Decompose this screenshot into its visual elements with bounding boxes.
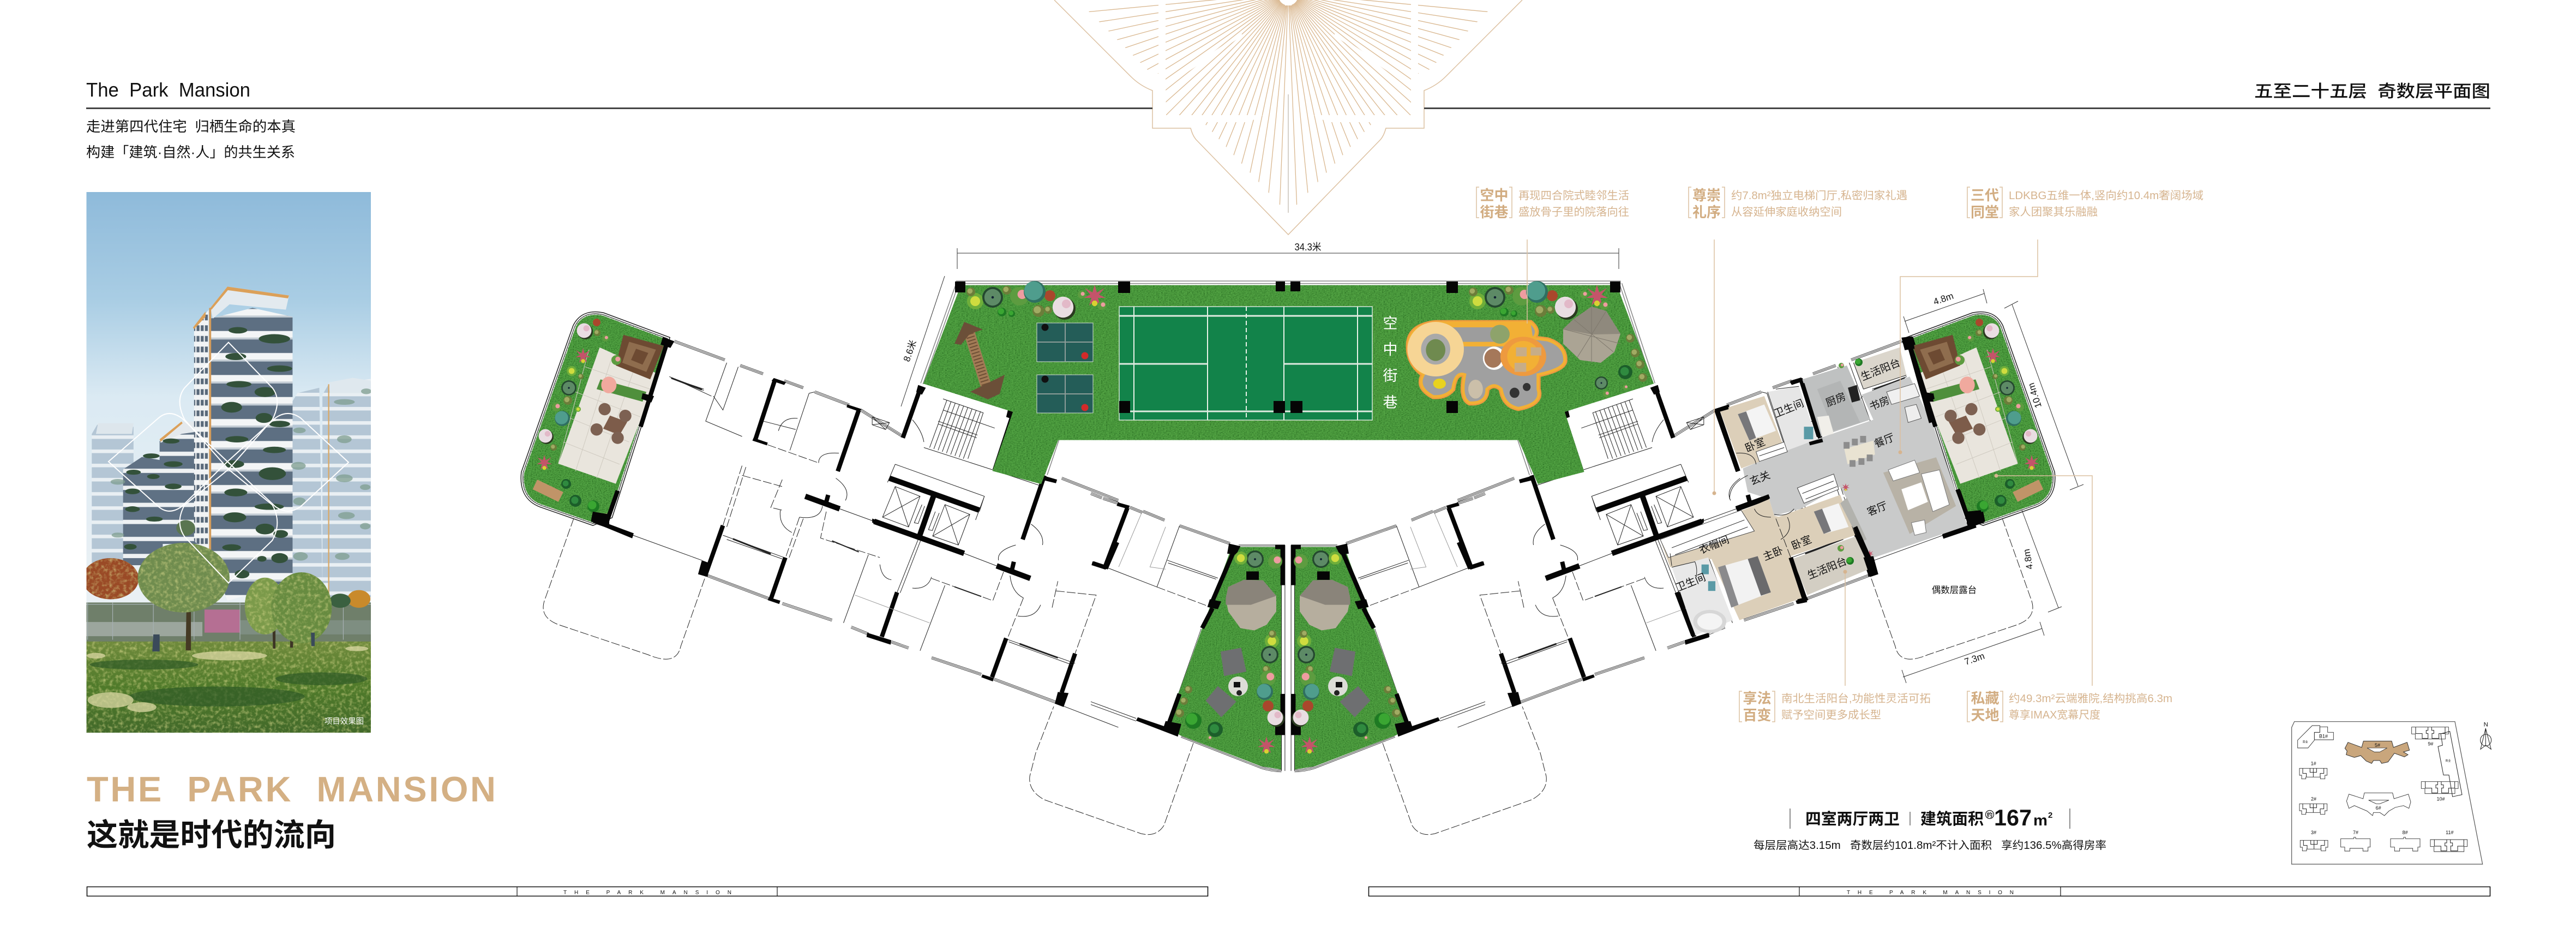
photo caption: 项目效果图: [325, 717, 364, 726]
label: sky street: [1383, 315, 1397, 411]
dimension: 8.6m: [901, 276, 945, 406]
label: sky street: 巷: [1383, 394, 1397, 411]
playground: [1407, 322, 1565, 408]
dimension: 4.8m top: 4.8m: [1932, 291, 1955, 307]
callout: private garden: [1967, 690, 2172, 723]
building B1: B1#: [2319, 734, 2328, 739]
callout: lobby: 约7.8m²独立电梯门厅,私密归家礼遇: [1731, 189, 1907, 202]
panel: sky street court: [922, 281, 1654, 484]
text block: floor notes: 每层层高达3.15m 奇数层约101.8m²不计入面积 享约136.5%高得房率: [1754, 839, 2106, 852]
commercial block east: [2438, 732, 2462, 797]
room labels: 卧室: [1743, 436, 1767, 454]
building 2: [2299, 796, 2327, 815]
callout: sky street: 空中: [1480, 187, 1509, 203]
callout: lobby: 礼序: [1692, 204, 1721, 220]
label: sky street: 空: [1383, 315, 1397, 332]
building 3: 3#: [2311, 830, 2316, 835]
dimension: 7.3m: 7.3m: [1963, 651, 1986, 667]
building 3: [2300, 830, 2328, 851]
area summary: 约: [1987, 811, 1992, 818]
callout: lobby: 从容延伸家庭收纳空间: [1731, 206, 1842, 218]
title: The Park Mansion: The Park Mansion: [86, 79, 250, 101]
building 1: 1#: [2311, 761, 2316, 766]
room labels: 生活阳台: [1806, 555, 1848, 582]
building 11: 11#: [2446, 830, 2453, 835]
callout: three generations: LDKBG五维一体,竖向约10.4m奢阔场域: [2009, 189, 2203, 202]
room labels: 卫生间: [1674, 571, 1708, 594]
dimension: 10.4m: [2004, 301, 2083, 490]
building 6: 6#: [2376, 805, 2381, 811]
even floor terrace outline: [543, 518, 1193, 835]
room labels: 玄关: [1748, 469, 1772, 488]
building 10: 10#: [2436, 796, 2445, 801]
table tennis tables: [1037, 323, 1093, 413]
leader lines: [1527, 240, 2092, 686]
icon: north arrow: [2481, 721, 2491, 749]
building 2: 2#: [2311, 796, 2316, 801]
label: sky street: 街: [1383, 368, 1397, 384]
building 9: 9#: [2428, 741, 2433, 746]
room labels: [1674, 357, 1902, 594]
room labels: 书房: [1868, 394, 1892, 413]
dimension: 34.3m width: 34.3米: [1295, 242, 1321, 253]
callout: sky street: [1476, 187, 1629, 220]
callout: private garden: 天地: [1971, 707, 1999, 723]
header rule left: [86, 107, 1152, 109]
building 6: [2346, 793, 2411, 816]
centre garden plants: [1175, 550, 1284, 753]
callout: private garden: 私藏: [1971, 690, 1999, 707]
floor plan: left half: [524, 314, 1288, 835]
area summary: 2: [2048, 811, 2052, 820]
callout: private garden: 尊享IMAX宽幕尺度: [2009, 709, 2100, 721]
wing walls and room lines: [591, 337, 1118, 727]
badminton court: [1119, 307, 1372, 420]
callout: lobby: [1689, 187, 1907, 220]
callout: balconies: 百变: [1743, 707, 1772, 723]
text block: slogan: [86, 118, 296, 160]
room labels: 餐厅: [1872, 432, 1896, 450]
footer band left: THE PARK MANSION: [563, 890, 731, 896]
room labels: 衣帽间: [1697, 534, 1731, 556]
callout: balconies: [1739, 690, 1931, 723]
dimension: 34.3m width: [957, 242, 1619, 269]
room labels: 卫生间: [1772, 397, 1806, 420]
callout: three generations: [1967, 187, 2203, 220]
building B1: 商业: [2303, 740, 2308, 744]
heading: slogan: 这就是时代的流向: [87, 818, 336, 853]
wooden bench: [954, 322, 1005, 399]
heading: floor plan title: 五至二十五层 奇数层平面图: [2254, 82, 2490, 101]
building 5 highlighted: [2345, 741, 2410, 763]
site boundary: [2292, 722, 2483, 864]
callout: sky street: 再现四合院式睦邻生活: [1518, 189, 1629, 202]
icon: north arrow: N: [2484, 721, 2488, 728]
site key map: [2292, 721, 2491, 864]
room floors: [1660, 348, 1967, 636]
plant cluster right: [1469, 281, 1608, 320]
footer band right: [1369, 887, 2490, 896]
room labels: 生活阳台: [1859, 357, 1902, 383]
sunburst decoration: [1054, 0, 1523, 235]
callout: lobby: 尊崇: [1692, 187, 1721, 203]
callout: sky street: 盛放骨子里的院落向往: [1518, 206, 1629, 218]
end terrace garden: [524, 314, 666, 523]
east side plants: [1595, 334, 1647, 397]
callout: balconies: 南北生活阳台,功能性灵活可拓: [1781, 692, 1931, 705]
dimension: 4.8m lower: 4.8m: [2021, 548, 2035, 570]
plant cluster: [966, 281, 1106, 320]
callout: balconies: 享法: [1743, 690, 1772, 707]
building 5 highlighted: 5#: [2375, 743, 2380, 748]
balcony plants: [1838, 358, 1874, 565]
room labels: 卧室: [1790, 534, 1814, 552]
footer band left: [87, 887, 1208, 896]
parasol: [1563, 307, 1620, 363]
building 10: [2421, 782, 2458, 801]
court lawn: [922, 282, 1654, 484]
label: even floor terrace: 偶数层露台: [1932, 585, 1977, 595]
text block: slogan: 走进第四代住宅 归栖生命的本真: [86, 118, 296, 135]
panel: building rendering photo: [82, 191, 371, 734]
building 1: [2299, 761, 2327, 779]
centre garden: [1091, 493, 1288, 771]
dimension: 4.8m lower: [2021, 510, 2062, 612]
heading: THE PARK MANSION: THE PARK MANSION: [87, 769, 496, 809]
callout: sky street: 街巷: [1480, 204, 1509, 220]
text block: slogan: 构建「建筑·自然·人」的共生关系: [86, 144, 295, 160]
label: sky street: 中: [1383, 342, 1397, 358]
room labels: 主卧: [1761, 544, 1785, 563]
room labels: 厨房: [1824, 391, 1848, 409]
room labels: 客厅: [1865, 500, 1889, 518]
unit walls: [1670, 336, 1984, 645]
dimension: 8.6m: 8.6米: [902, 339, 918, 363]
dimension: 4.8m top: [1904, 289, 1987, 333]
building 7: [2341, 830, 2370, 851]
building B1: [2298, 726, 2333, 748]
area summary: 建筑面积: [1920, 810, 1984, 828]
callout: private garden: 约49.3m²云端雅院,结构挑高6.3m: [2009, 692, 2172, 705]
area summary: 167: [1994, 805, 2032, 830]
footer band right: THE PARK MANSION: [1847, 890, 2014, 896]
floor plan: mirrored right half: [1288, 314, 2052, 835]
area summary: 四室两厅两卫: [1805, 810, 1900, 828]
callout: three generations: 三代: [1971, 187, 1999, 203]
area summary: m: [2033, 812, 2047, 829]
court columns: [955, 282, 1620, 413]
header rule right: [1424, 107, 2490, 109]
dimension: 7.3m: [1902, 622, 2044, 683]
building 8: [2391, 830, 2420, 851]
area summary: [1790, 805, 2070, 830]
commercial block east: 商业: [2445, 759, 2451, 763]
callout: three generations: 家人团聚其乐融融: [2009, 206, 2098, 218]
building 9: [2412, 727, 2448, 746]
callout: balconies: 赋予空间更多成长型: [1781, 709, 1881, 721]
building 11: [2430, 830, 2467, 852]
panel: coloured four bedroom unit: [1660, 336, 1984, 645]
callout: three generations: 同堂: [1971, 204, 1999, 220]
terrace plants: [537, 319, 621, 518]
building 8: 8#: [2403, 830, 2408, 835]
dimension: 10.4m: 10.4m: [2026, 381, 2044, 409]
building 7: 7#: [2353, 830, 2358, 835]
furniture: [1694, 381, 1956, 633]
